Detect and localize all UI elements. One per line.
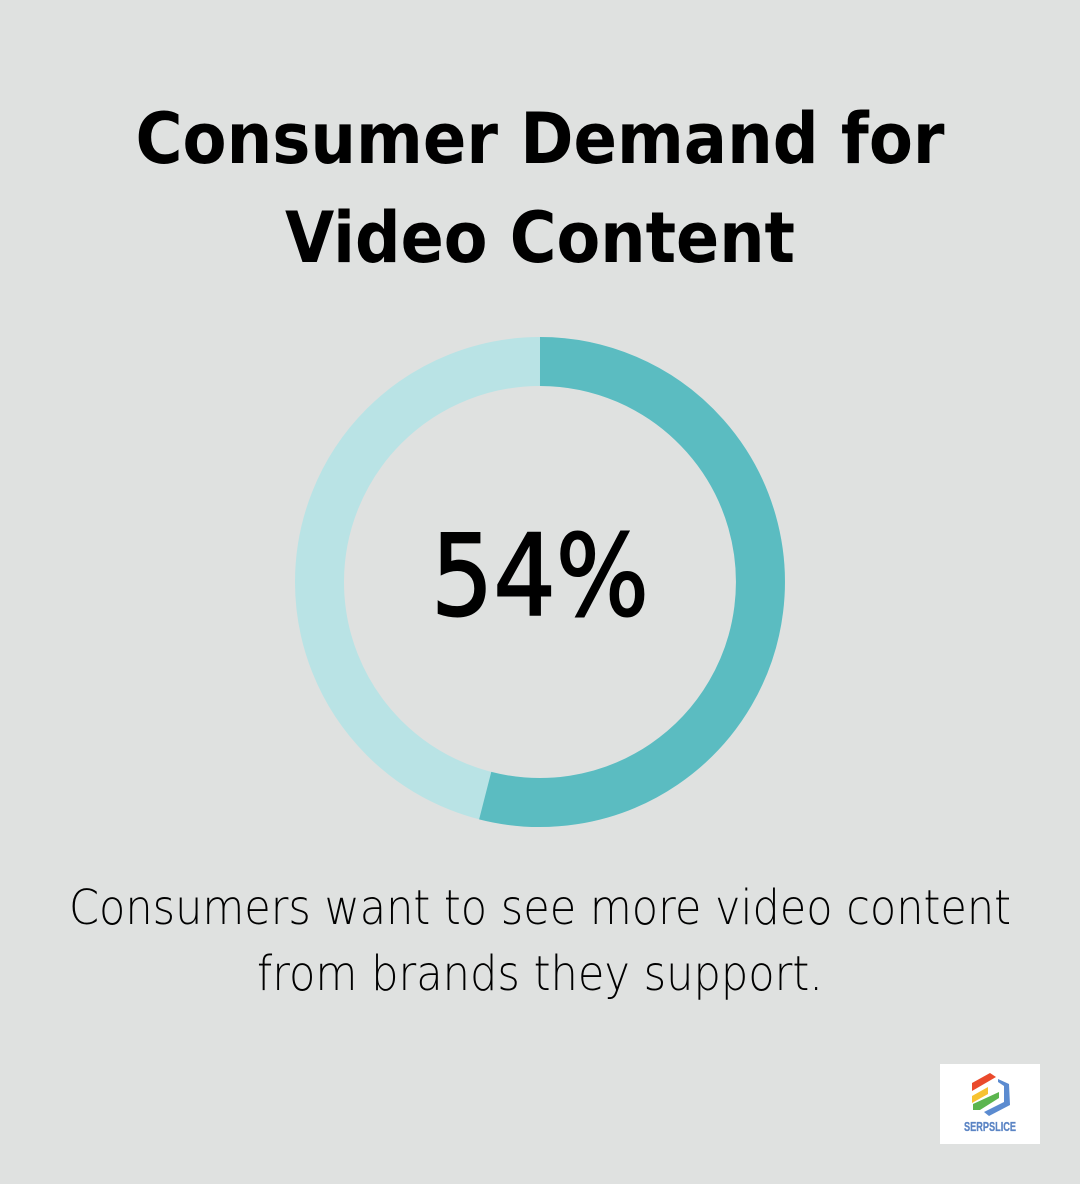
logo wordmark: SERPSLICE <box>964 1119 1016 1134</box>
icon: logo stripes <box>972 1073 1010 1116</box>
donut chart: 54% <box>320 362 760 802</box>
title: Video Content <box>285 197 795 279</box>
center value: 54% <box>431 512 649 642</box>
description text: from brands they support. <box>257 946 823 1002</box>
title <box>136 98 945 279</box>
logo: SerpSlice <box>940 1064 1040 1144</box>
description text <box>69 880 1011 1002</box>
title: Consumer Demand for <box>136 98 945 180</box>
